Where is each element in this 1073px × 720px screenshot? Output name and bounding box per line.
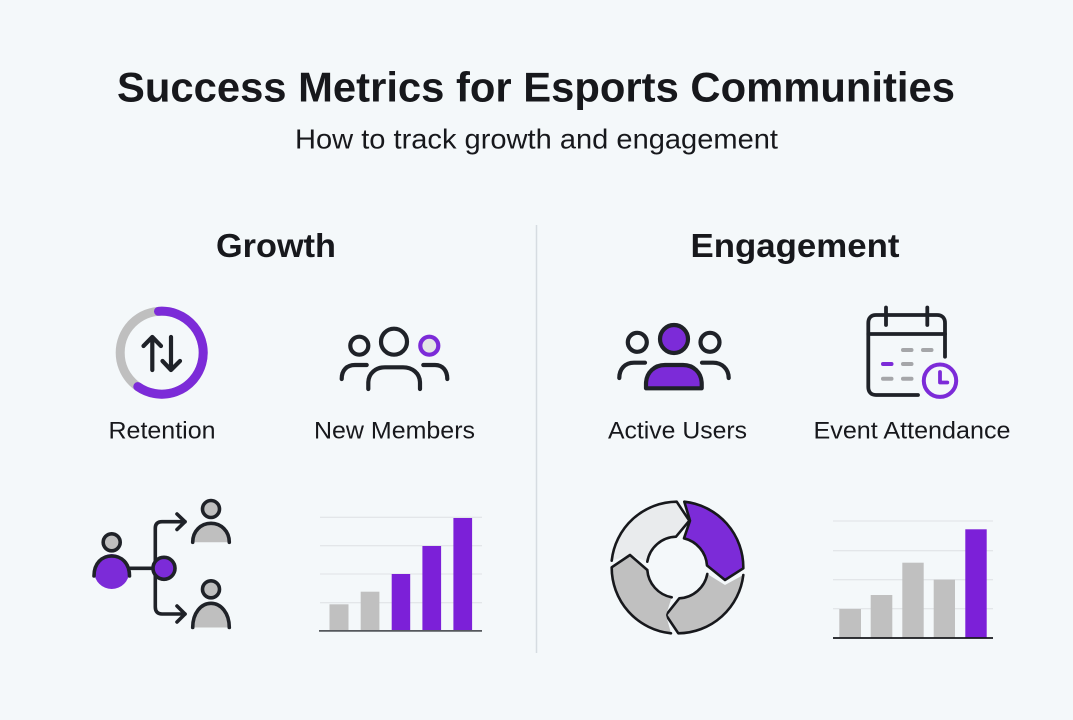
label: New Members: New Members <box>314 418 475 444</box>
segment: gray right <box>666 574 743 633</box>
label: Retention: Retention <box>108 418 216 444</box>
chart: growth bars <box>319 517 482 631</box>
title: Success Metrics for Esports Communities <box>117 64 955 110</box>
icon: active users <box>619 325 729 388</box>
label: Event Attendance: Event Attendance <box>814 418 1010 444</box>
segment: gray left <box>612 555 672 633</box>
segment: purple <box>684 502 743 580</box>
segment: light <box>612 502 689 562</box>
icon: new members <box>342 329 447 389</box>
chart: cycle donut <box>612 502 743 633</box>
subtitle: How to track growth and engagement <box>295 124 778 154</box>
label: Active Users: Active Users <box>608 418 747 444</box>
icon: referral flow <box>94 500 229 628</box>
heading: Growth: Growth <box>216 227 336 264</box>
chart: engagement bars <box>833 521 993 638</box>
heading: Engagement: Engagement <box>690 227 900 264</box>
icon: event calendar <box>868 308 956 397</box>
icon: retention ring <box>120 311 203 394</box>
